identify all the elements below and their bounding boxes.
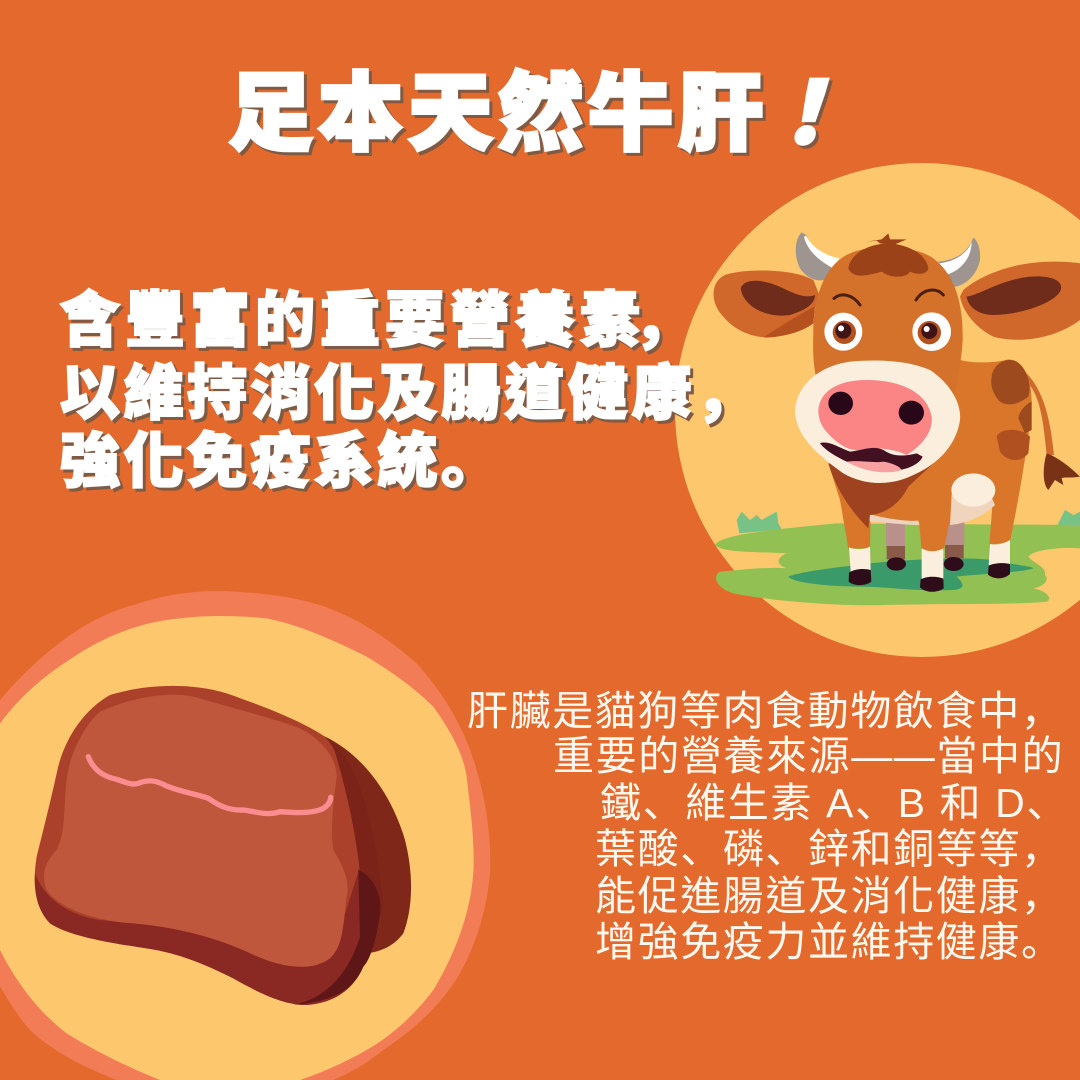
eyebrows bbox=[834, 290, 943, 305]
tail bbox=[1025, 372, 1080, 490]
text block: liver nutrition description bbox=[467, 688, 1069, 965]
chest shadow bbox=[828, 463, 933, 528]
text block: liver nutrition description: 能促進腸道及消化健康， bbox=[595, 873, 1064, 919]
title: 足本天然牛肝！ bbox=[228, 67, 872, 162]
liver main mass bbox=[35, 686, 366, 1005]
heading: key benefits: 強化免疫系統。 bbox=[60, 428, 504, 495]
head bbox=[813, 247, 963, 413]
hair tuft bbox=[848, 233, 928, 277]
lower rim shade bbox=[35, 867, 366, 1005]
panel: liver background rings bbox=[0, 591, 490, 1080]
nose bbox=[818, 380, 932, 455]
eyes bbox=[824, 312, 951, 351]
icon: liver illustration bbox=[35, 686, 411, 1005]
left ear bbox=[714, 270, 820, 337]
mouth bbox=[820, 443, 923, 472]
heading: key benefits bbox=[59, 287, 758, 495]
right ear bbox=[960, 262, 1080, 340]
text block: liver nutrition description: 葉酸、磷、鋅和銅等等， bbox=[595, 826, 1064, 872]
heading: key benefits: 含豐富的重要營養素， bbox=[60, 287, 698, 354]
front and rear legs bbox=[828, 410, 1032, 592]
text block: liver nutrition description: 肝臟是貓狗等肉食動物飲食中， bbox=[467, 688, 1063, 734]
right side band bbox=[325, 737, 383, 957]
back legs bbox=[886, 517, 964, 571]
inner yellow disc bbox=[0, 616, 474, 1080]
heading: key benefits: 以維持消化及腸道健康， bbox=[60, 360, 758, 427]
back lobe bbox=[325, 737, 411, 953]
horns bbox=[796, 232, 980, 287]
panel: cow background circle bbox=[675, 163, 1080, 657]
muzzle bbox=[795, 361, 960, 483]
liver top face bbox=[44, 695, 348, 967]
text block: liver nutrition description: 重要的營養來源——當中的 bbox=[553, 733, 1064, 779]
body spots bbox=[991, 360, 1032, 460]
grass patch bbox=[715, 510, 1080, 605]
pink vein line bbox=[88, 757, 331, 814]
text block: liver nutrition description: 鐵、維生素 A、B 和 D、 bbox=[600, 780, 1069, 826]
dark fold bbox=[293, 870, 380, 1005]
text block: liver nutrition description: 增強免疫力並維持健康。 bbox=[595, 919, 1064, 965]
belly and udder bbox=[868, 473, 995, 525]
icon: cow illustration bbox=[714, 232, 1080, 605]
body bbox=[828, 359, 1032, 522]
outer salmon ring bbox=[0, 591, 490, 1080]
